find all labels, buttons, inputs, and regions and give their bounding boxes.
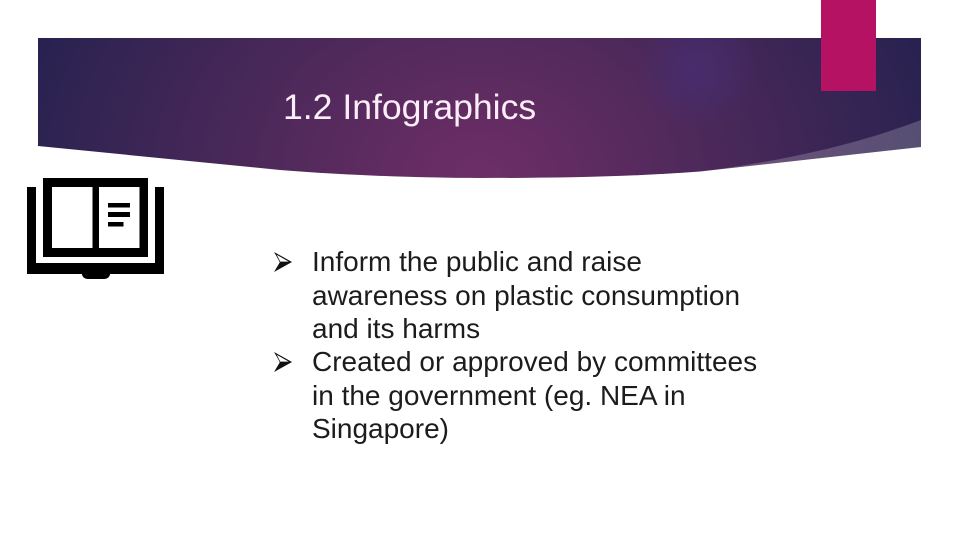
bullet text 1 — [312, 246, 740, 344]
bullet text 2: in the government (eg. NEA in — [312, 380, 686, 410]
accent tab — [821, 0, 876, 91]
bullet text 1: Inform the public and raise — [312, 246, 642, 277]
bullet text 2: Created or approved by committees — [312, 346, 757, 377]
bullet arrow 2 — [274, 352, 292, 372]
bullet text 2: Singapore) — [312, 413, 449, 444]
banner light swoosh — [700, 120, 921, 172]
bullet text 2 — [312, 346, 757, 444]
bullet text 1: and its harms — [312, 313, 480, 344]
title: 1.2 Infographics — [283, 87, 536, 127]
icon: open book — [27, 178, 164, 279]
bullet arrow 1 — [274, 252, 292, 272]
bullet list — [274, 252, 292, 372]
bullet text 1: awareness on plastic consumption — [312, 280, 740, 310]
